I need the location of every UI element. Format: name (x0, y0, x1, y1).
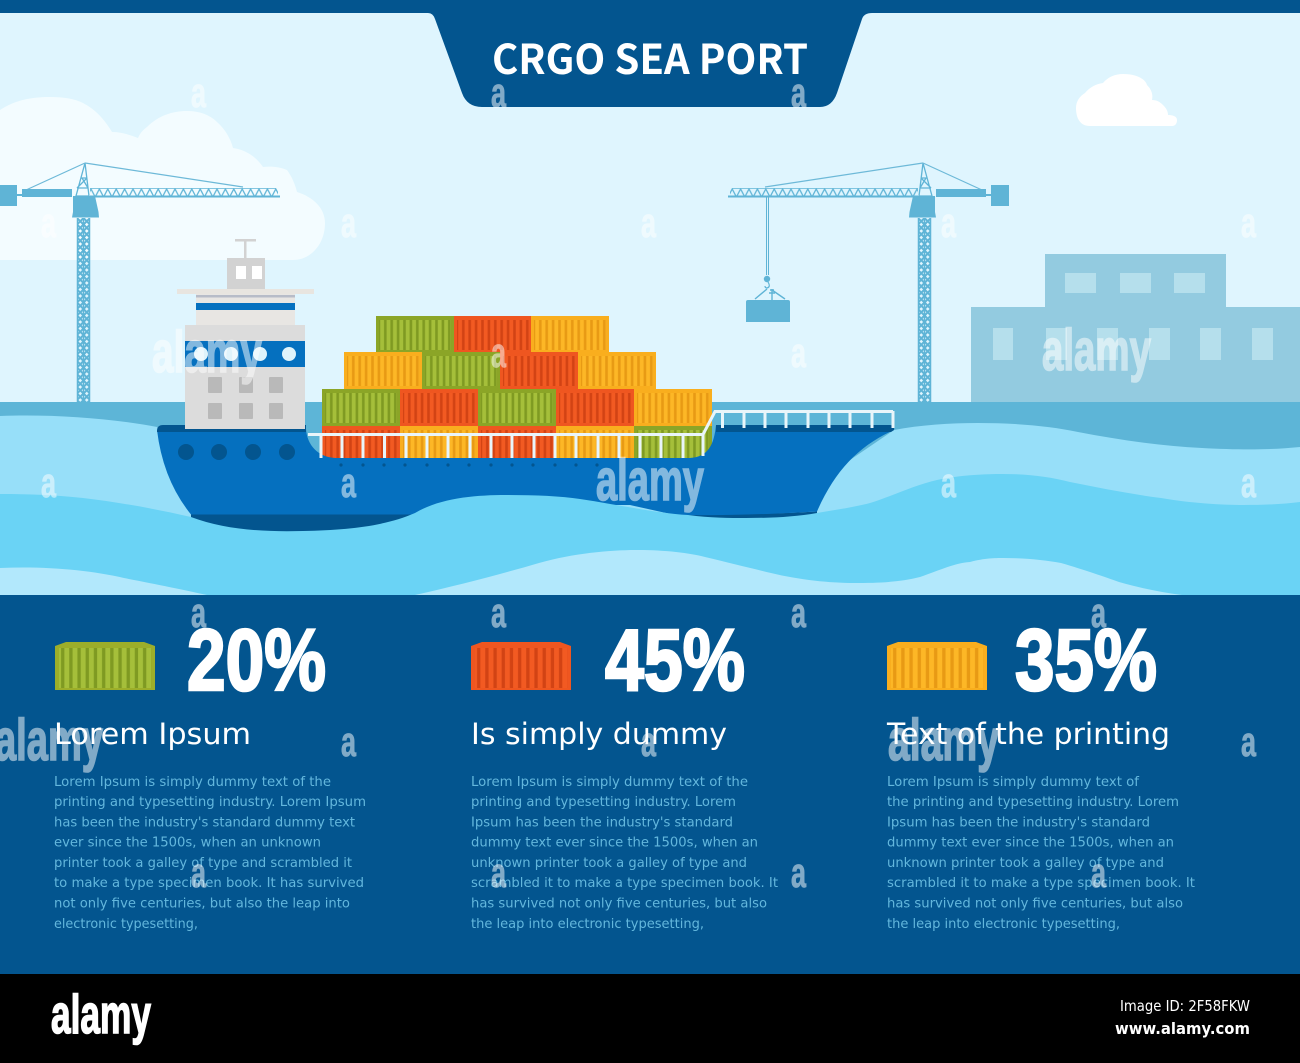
watermarks: a (791, 69, 806, 116)
body text: Ipsum has been the industry's standard (471, 816, 733, 830)
footer url: www.alamy.com (1115, 1019, 1250, 1038)
watermarks: a (491, 329, 506, 376)
body text: Ipsum has been the industry's standard (887, 816, 1150, 830)
watermarks: a (941, 199, 956, 246)
watermarks: a (941, 459, 956, 506)
body text: the printing and typesetting industry. Lorem (887, 795, 1179, 810)
hull (157, 425, 894, 515)
watermarks: alamy (1042, 318, 1151, 383)
footer image id: Image ID: 2F58FKW (1120, 997, 1250, 1015)
front wave left (0, 567, 207, 595)
watermarks: a (191, 849, 206, 896)
sky background (0, 0, 1300, 600)
heading: Lorem Ipsum (54, 717, 251, 751)
watermarks (0, 69, 1256, 896)
watermarks: a (41, 199, 56, 246)
front wave centre (415, 550, 1182, 595)
watermarks: a (791, 329, 806, 376)
watermarks: a (491, 849, 506, 896)
icon: yellow container (887, 642, 987, 690)
building (971, 254, 1300, 403)
hull portholes (178, 444, 295, 460)
second row (344, 352, 656, 389)
body text: has survived not only five centuries, but also (887, 896, 1183, 912)
cloud right (1076, 74, 1177, 126)
body text: to make a type specimen book. It has survived (54, 876, 364, 891)
cloud left (0, 97, 325, 260)
footer bar (0, 974, 1300, 1063)
body text (471, 775, 778, 932)
crane left (0, 163, 280, 403)
body text (54, 775, 366, 932)
body text: scrambled it to make a type specimen book. It (887, 876, 1195, 891)
deck strip front (716, 425, 894, 432)
watermarks: a (341, 718, 356, 765)
horizon water (0, 402, 1300, 462)
top bar (0, 0, 1300, 13)
containers stack (322, 316, 712, 463)
watermarks: a (791, 849, 806, 896)
watermarks: a (491, 69, 506, 116)
watermarks: a (791, 589, 806, 636)
body text: unknown printer took a galley of type and (471, 856, 747, 871)
footer logo: alamy (51, 983, 151, 1045)
percentage 45: 45% (605, 612, 745, 709)
body text: not only five centuries, but also the leap into (54, 896, 350, 912)
stat column 2 (471, 612, 778, 932)
body text: unknown printer took a galley of type and (887, 856, 1164, 871)
watermarks: a (1241, 199, 1256, 246)
body text: the leap into electronic typesetting, (471, 917, 704, 932)
watermarks: a (491, 589, 506, 636)
watermarks: a (191, 69, 206, 116)
body text: printing and typesetting industry. Lorem (471, 795, 736, 810)
watermarks: a (191, 589, 206, 636)
watermarks: a (641, 199, 656, 246)
watermarks: a (1091, 589, 1106, 636)
watermarks: alamy (596, 448, 704, 513)
watermarks: a (1091, 849, 1106, 896)
body text: printing and typesetting industry. Lorem Ipsum (54, 795, 366, 810)
body text: scrambled it to make a type specimen book. It (471, 876, 778, 891)
body text: electronic typesetting, (54, 917, 198, 932)
bottom row (322, 426, 712, 463)
body text: dummy text ever since the 1500s, when an (471, 836, 758, 851)
body text: has survived not only five centuries, but also (471, 896, 767, 912)
third row (322, 389, 712, 426)
ship (157, 239, 894, 535)
body text: printer took a galley of type and scrambled it (54, 856, 352, 871)
body text: the leap into electronic typesetting, (887, 917, 1120, 932)
watermarks: a (341, 199, 356, 246)
keel (191, 512, 817, 535)
crane right with load (728, 163, 1009, 403)
body text: Lorem Ipsum is simply dummy text of (887, 775, 1139, 790)
body text (887, 775, 1195, 932)
icon: green container (55, 642, 155, 690)
railing (308, 411, 893, 458)
body text: Lorem Ipsum is simply dummy text of the (471, 775, 748, 790)
bottom panel (0, 595, 1300, 974)
watermarks: a (641, 718, 656, 765)
body text: ever since the 1500s, when an unknown (54, 836, 321, 851)
watermarks: a (1241, 718, 1256, 765)
body text: Lorem Ipsum is simply dummy text of the (54, 775, 331, 790)
back wave (0, 415, 1300, 600)
heading: Is simply dummy (471, 717, 727, 751)
body text: has been the industry's standard dummy text (54, 816, 355, 830)
middle wave (0, 474, 1300, 600)
percentage 20: 20% (187, 612, 326, 709)
watermarks: a (41, 459, 56, 506)
watermarks: a (341, 459, 356, 506)
body text: dummy text ever since the 1500s, when an (887, 836, 1174, 851)
watermarks: alamy (888, 708, 999, 773)
icon: orange container (471, 642, 571, 690)
heading: Text of the printing (886, 717, 1170, 751)
stat column 3 (886, 612, 1195, 932)
watermarks: a (1241, 459, 1256, 506)
hull rivets (339, 463, 599, 467)
title banner (428, 13, 872, 107)
percentage 35: 35% (1015, 612, 1157, 709)
title: CRGO SEA PORT (492, 26, 808, 86)
stat column 1 (54, 612, 366, 932)
watermarks: alamy (152, 320, 262, 385)
deck strip rear (157, 425, 306, 432)
superstructure (177, 239, 314, 429)
top row (376, 316, 609, 353)
